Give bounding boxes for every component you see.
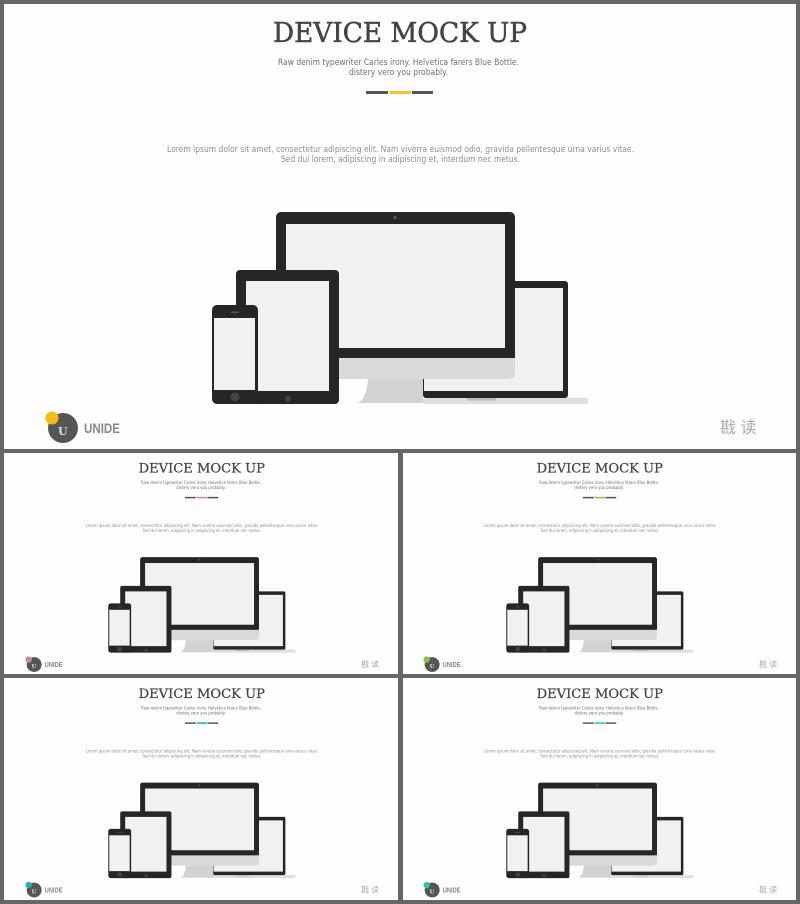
panel: main slide bbox=[4, 4, 796, 449]
thumbnail divider bbox=[583, 497, 616, 498]
divider: yellow accent bbox=[366, 91, 433, 94]
thumbnail logo bbox=[25, 882, 42, 897]
thumbnail read label: 戡 读 bbox=[759, 659, 777, 669]
panel: thumbnail green bbox=[403, 453, 796, 674]
thumbnail body text bbox=[484, 749, 716, 760]
thumbnail divider bbox=[185, 497, 218, 498]
logo: U bbox=[58, 425, 68, 438]
thumbnail body text: Sed dui lorem, adipiscing in adipiscing et, interdum nec metus. bbox=[143, 528, 262, 534]
panel: thumbnail pink bbox=[4, 453, 398, 674]
thumbnail subtitle: Raw denim typewriter Carles irony. Helvetica farers Blue Bottle. bbox=[539, 705, 659, 711]
thumbnail devices bbox=[108, 557, 295, 653]
thumbnail logo: U bbox=[430, 664, 435, 670]
title: DEVICE MOCK UP bbox=[273, 18, 527, 49]
thumbnail body text bbox=[86, 523, 318, 534]
thumbnail subtitle bbox=[539, 480, 659, 491]
thumbnail body text bbox=[86, 749, 318, 760]
thumbnail title: DEVICE MOCK UP bbox=[139, 687, 265, 702]
logo bbox=[46, 412, 78, 443]
thumbnail devices bbox=[506, 783, 693, 878]
thumbnail devices bbox=[108, 783, 295, 878]
thumbnail brand: UNIDE bbox=[45, 662, 63, 669]
thumbnail subtitle: distery vero you probably. bbox=[574, 485, 624, 491]
thumbnail title: DEVICE MOCK UP bbox=[139, 461, 265, 476]
subtitle: Raw denim typewriter Carles irony. Helvetica farers Blue Bottle. bbox=[278, 58, 519, 68]
thumbnail body text bbox=[484, 523, 716, 534]
thumbnail logo: U bbox=[32, 664, 37, 670]
thumbnail subtitle: distery vero you probably. bbox=[176, 710, 226, 716]
thumbnail title: DEVICE MOCK UP bbox=[537, 461, 663, 476]
thumbnail logo bbox=[25, 656, 42, 672]
subtitle: distery vero you probably. bbox=[349, 68, 448, 78]
thumbnail subtitle: Raw denim typewriter Carles irony. Helvetica farers Blue Bottle. bbox=[141, 705, 261, 711]
thumbnail subtitle bbox=[141, 705, 261, 716]
thumbnail divider bbox=[185, 722, 218, 724]
thumbnail logo bbox=[423, 656, 440, 672]
thumbnail body text: Lorem ipsum dolor sit amet, consectetur adipiscing elit. Nam viverra euismod odio, gravida pellentesque urna varius vitae. bbox=[86, 749, 318, 755]
thumbnail read label: 戡 读 bbox=[361, 659, 379, 669]
thumbnail body text: Sed dui lorem, adipiscing in adipiscing et, interdum nec metus. bbox=[143, 754, 262, 760]
thumbnail logo: U bbox=[430, 890, 435, 896]
thumbnail subtitle: Raw denim typewriter Carles irony. Helvetica farers Blue Bottle. bbox=[539, 480, 659, 486]
body text: Lorem ipsum dolor sit amet, consectetur adipiscing elit. Nam viverra euismod odio, gravida pellentesque urna varius vitae. bbox=[167, 145, 634, 155]
subtitle bbox=[278, 58, 519, 78]
thumbnail read label: 戡 读 bbox=[361, 885, 379, 895]
thumbnail body text: Lorem ipsum dolor sit amet, consectetur adipiscing elit. Nam viverra euismod odio, gravida pellentesque urna varius vitae. bbox=[484, 523, 716, 529]
panel: thumbnail teal bbox=[403, 678, 796, 900]
thumbnail body text: Sed dui lorem, adipiscing in adipiscing et, interdum nec metus. bbox=[541, 754, 660, 760]
thumbnail body text: Lorem ipsum dolor sit amet, consectetur adipiscing elit. Nam viverra euismod odio, gravida pellentesque urna varius vitae. bbox=[86, 523, 318, 529]
thumbnail subtitle bbox=[539, 705, 659, 716]
body text: Sed dui lorem, adipiscing in adipiscing et, interdum nec metus. bbox=[281, 155, 520, 165]
thumbnail subtitle bbox=[141, 480, 261, 491]
thumbnail logo: U bbox=[32, 890, 37, 896]
brand name: UNIDE bbox=[84, 420, 120, 436]
thumbnail body text: Sed dui lorem, adipiscing in adipiscing et, interdum nec metus. bbox=[541, 528, 660, 534]
thumbnail subtitle: Raw denim typewriter Carles irony. Helvetica farers Blue Bottle. bbox=[141, 480, 261, 486]
thumbnail devices bbox=[506, 557, 693, 653]
thumbnail brand: UNIDE bbox=[45, 888, 63, 895]
body text bbox=[167, 145, 634, 165]
thumbnail divider bbox=[583, 722, 616, 724]
thumbnail brand: UNIDE bbox=[443, 888, 461, 895]
thumbnail subtitle: distery vero you probably. bbox=[574, 710, 624, 716]
thumbnail read label: 戡 读 bbox=[759, 885, 777, 895]
device mockups bbox=[212, 212, 588, 404]
thumbnail brand: UNIDE bbox=[443, 662, 461, 669]
thumbnail title: DEVICE MOCK UP bbox=[537, 687, 663, 702]
panel: thumbnail blue bbox=[4, 678, 398, 900]
thumbnail logo bbox=[423, 882, 440, 897]
read label: 戡 读 bbox=[720, 419, 756, 437]
thumbnail body text: Lorem ipsum dolor sit amet, consectetur adipiscing elit. Nam viverra euismod odio, gravida pellentesque urna varius vitae. bbox=[484, 749, 716, 755]
thumbnail subtitle: distery vero you probably. bbox=[176, 485, 226, 491]
